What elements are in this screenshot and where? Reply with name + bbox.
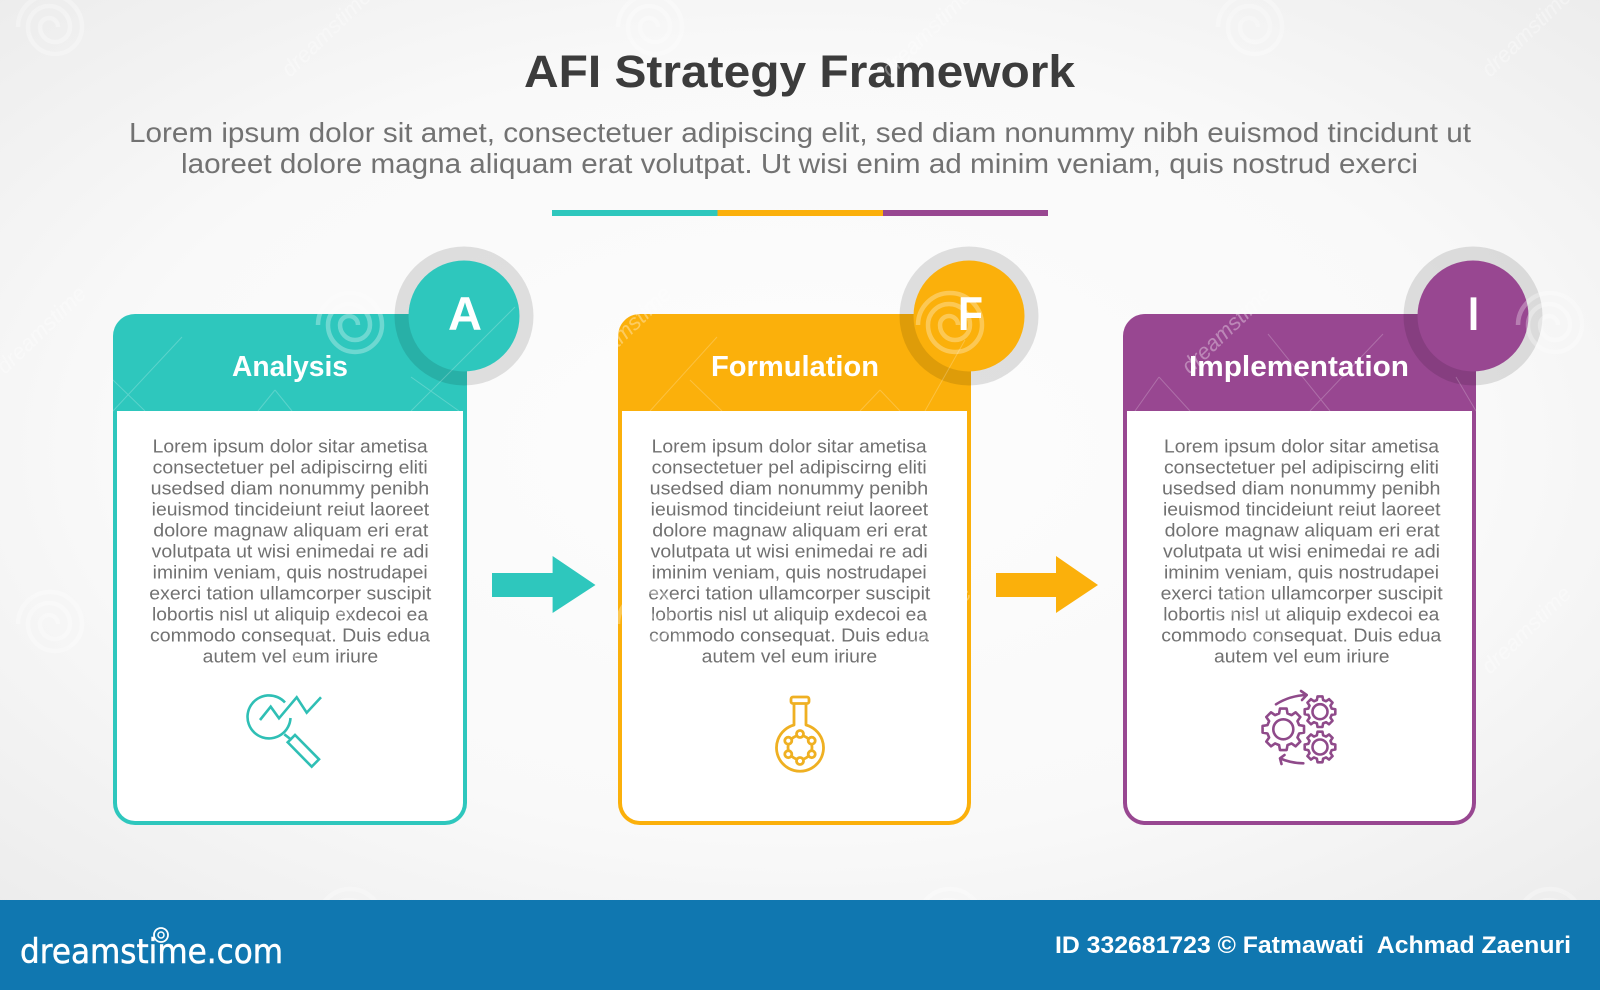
panel: implementation: [1123, 246, 1542, 825]
implementation body text: iminim veniam, quis nostrudapei: [1164, 562, 1439, 582]
formulation body text: usedsed diam nonummy penibh: [650, 478, 928, 499]
analysis body text: autem vel eum iriure: [203, 645, 378, 666]
analysis body text: Lorem ipsum dolor sitar ametisa: [153, 436, 428, 457]
formulation body text: dolore magnaw aliquam eri erat: [652, 520, 927, 540]
analysis body text: consectetuer pel adipiscirng eliti: [153, 457, 428, 478]
analysis card frame: [113, 314, 467, 825]
formulation card frame: [618, 314, 971, 825]
analysis body text: commodo consequat. Duis edua: [150, 624, 431, 645]
formulation body text: Lorem ipsum dolor sitar ametisa: [652, 436, 927, 457]
analysis badge: A: [448, 287, 482, 340]
analysis body text: [149, 436, 431, 666]
formulation body text: consectetuer pel adipiscirng eliti: [652, 457, 927, 478]
implementation body text: commodo consequat. Duis edua: [1161, 624, 1442, 645]
panel: analysis: [113, 246, 534, 825]
implementation body text: autem vel eum iriure: [1214, 645, 1390, 666]
analysis body text: ieuismod tincideiunt reiut laoreet: [152, 499, 429, 520]
arrow: analysis to formulation: [492, 556, 596, 613]
analysis body text: dolore magnaw aliquam eri erat: [153, 520, 428, 540]
subtitle text: Lorem ipsum dolor sit amet, consectetuer adipiscing elit, sed diam nonummy nibh euismod tincidunt ut: [129, 117, 1471, 148]
implementation card body: [1127, 411, 1472, 821]
icon: chemistry flask: [776, 697, 823, 771]
footer credit: ID 332681723 © Fatmawati Achmad Zaenuri: [1055, 932, 1571, 959]
tricolor divider: [552, 210, 1048, 216]
implementation body text: volutpata ut wisi enimedai re adi: [1163, 540, 1440, 562]
formulation body text: autem vel eum iriure: [702, 645, 877, 666]
title: AFI Strategy Framework: [524, 46, 1076, 97]
formulation body text: lobortis nisl ut aliquip exdecoi ea: [651, 603, 928, 624]
formulation badge: F: [958, 287, 983, 340]
icon: magnifier over chart: [248, 695, 321, 767]
formulation body text: exerci tation ullamcorper suscipit: [648, 582, 930, 603]
icon: gears with cycle arrows: [1263, 691, 1335, 764]
panel: formulation: [618, 246, 1038, 825]
implementation body text: Lorem ipsum dolor sitar ametisa: [1164, 436, 1440, 457]
analysis body text: iminim veniam, quis nostrudapei: [153, 562, 428, 582]
analysis heading: Analysis: [232, 351, 348, 383]
formulation body text: commodo consequat. Duis edua: [649, 624, 930, 645]
footer logo: dreamstime.com: [20, 932, 283, 972]
analysis body text: volutpata ut wisi enimedai re adi: [152, 540, 429, 562]
implementation badge: I: [1468, 287, 1479, 340]
formulation body text: volutpata ut wisi enimedai re adi: [651, 540, 928, 562]
watermark pattern: dreamstime: [576, 281, 676, 379]
formulation body text: ieuismod tincideiunt reiut laoreet: [651, 499, 928, 520]
formulation card body: [622, 411, 967, 821]
analysis body text: usedsed diam nonummy penibh: [151, 478, 429, 499]
implementation body text: ieuismod tincideiunt reiut laoreet: [1163, 499, 1440, 520]
implementation badge: [1404, 246, 1542, 386]
implementation body text: consectetuer pel adipiscirng eliti: [1164, 457, 1439, 478]
implementation card frame: [1123, 314, 1476, 825]
formulation body text: [648, 436, 930, 666]
formulation heading: Formulation: [711, 351, 879, 383]
implementation body text: dolore magnaw aliquam eri erat: [1165, 520, 1440, 540]
footer bar: [0, 900, 1600, 990]
watermark pattern: dreamstime: [1176, 281, 1276, 379]
watermark pattern: dreamstime: [1476, 581, 1576, 679]
implementation body text: exerci tation ullamcorper suscipit: [1161, 582, 1443, 603]
implementation body text: lobortis nisl ut aliquip exdecoi ea: [1163, 603, 1440, 624]
analysis card body: [117, 411, 463, 821]
analysis body text: exerci tation ullamcorper suscipit: [149, 582, 431, 603]
subtitle text: laoreet dolore magna aliquam erat volutpat. Ut wisi enim ad minim veniam, quis nostrud exerci: [181, 148, 1418, 179]
analysis badge: [394, 246, 534, 386]
watermark pattern: dreamstime: [876, 581, 976, 679]
analysis body text: lobortis nisl ut aliquip exdecoi ea: [152, 603, 429, 624]
implementation body text: [1161, 436, 1443, 666]
implementation body text: usedsed diam nonummy penibh: [1162, 478, 1440, 499]
implementation heading: Implementation: [1189, 351, 1409, 383]
watermark pattern: dreamstime: [276, 581, 376, 679]
subtitle text: [129, 117, 1471, 179]
arrow: formulation to implementation: [996, 556, 1098, 613]
formulation body text: iminim veniam, quis nostrudapei: [652, 562, 927, 582]
formulation badge: [900, 246, 1038, 386]
